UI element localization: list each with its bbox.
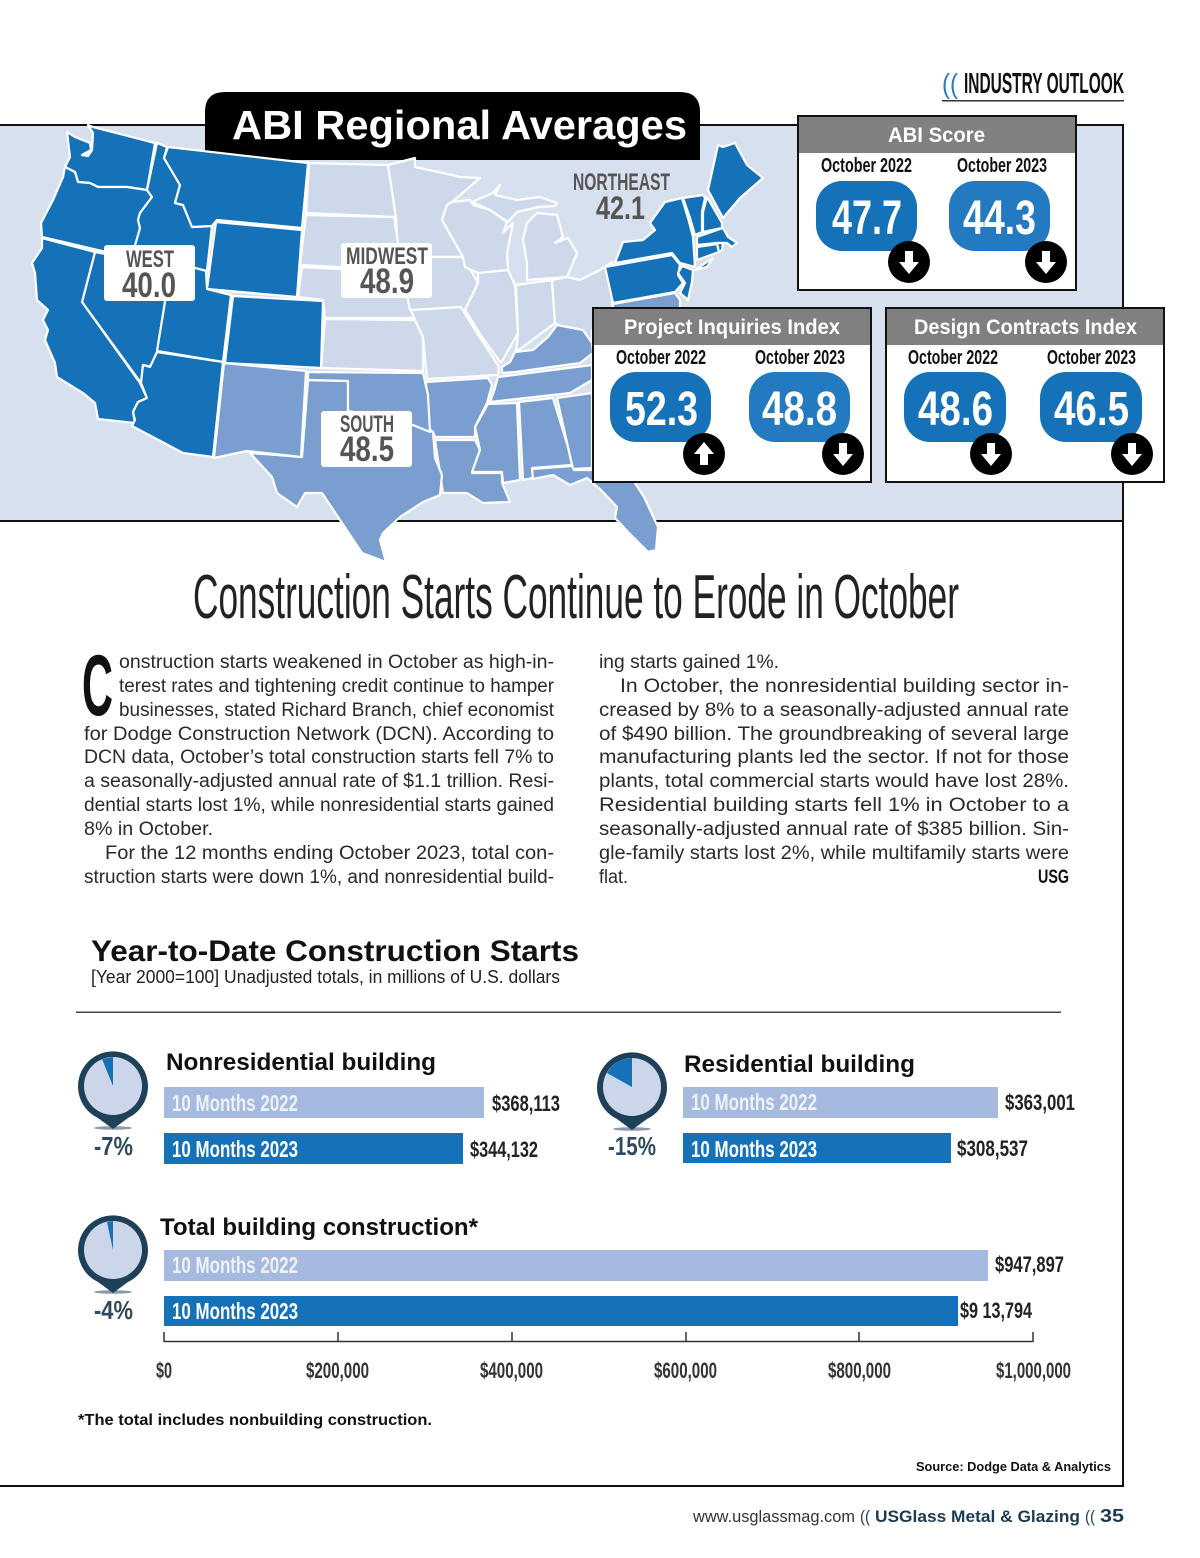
chart axis <box>156 1332 1071 1383</box>
chart axis: $200,000 <box>306 1358 369 1383</box>
chart: nonresidential building: $368,113 <box>492 1091 560 1116</box>
midwest region states <box>298 158 612 379</box>
northeast region states <box>605 143 763 303</box>
callout: northeast region: 42.1 <box>596 190 645 226</box>
chart: nonresidential building: Nonresidential building <box>166 1049 436 1076</box>
chart: total building construction: $947,897 <box>995 1252 1064 1277</box>
article text: right column: of $490 billion. The groundbreaking of several large <box>599 724 1069 745</box>
icon: gauge pin -7% <box>78 1051 148 1161</box>
article text: left column: terest rates and tightening credit continue to hamper <box>119 676 555 697</box>
chart: nonresidential building <box>164 1049 560 1164</box>
panel: Project Inquiries Index: Project Inquiries Index <box>624 316 840 339</box>
south region states <box>214 293 680 562</box>
article text: left column: 8% in October. <box>84 819 213 840</box>
callout: midwest region: MIDWEST <box>346 243 428 270</box>
icon: gauge pin -15% <box>597 1052 667 1161</box>
article text: right column <box>599 652 1069 888</box>
chart: nonresidential building: $344,132 <box>470 1137 538 1162</box>
chart: nonresidential building: 10 Months 2022 <box>172 1090 298 1116</box>
article text: left column: dential starts lost 1%, while nonresidential starts gained <box>84 795 554 816</box>
chart heading <box>76 935 1061 1013</box>
footnote: *The total includes nonbuilding construction. <box>78 1412 432 1429</box>
chart axis: $600,000 <box>654 1358 717 1383</box>
callout: south region <box>321 411 412 469</box>
panel: ABI Score: ABI Score <box>888 124 985 147</box>
article text: right column: USG <box>1038 867 1069 888</box>
article text: left column: businesses, stated Richard Branch, chief economist <box>119 700 555 721</box>
article text: right column: gle-family starts lost 2%, while multifamily starts were <box>599 843 1069 864</box>
icon: gauge pin -4% <box>78 1215 148 1325</box>
chart: total building construction: 10 Months 2022 <box>172 1252 298 1278</box>
chart: total building construction <box>160 1214 1064 1326</box>
callout: south region: SOUTH <box>340 411 394 438</box>
panel: Design Contracts Index: 48.6 <box>918 383 993 436</box>
callout: west region <box>104 245 195 305</box>
article text: right column: seasonally-adjusted annual rate of $385 billion. Sin- <box>599 819 1069 840</box>
article text: right column: In October, the nonresidential building sector in- <box>620 676 1069 697</box>
chart heading: Year-to-Date Construction Starts <box>91 935 579 968</box>
page footer: (( <box>1085 1507 1095 1526</box>
panel: Design Contracts Index: October 2022 <box>908 347 998 369</box>
article text: left column: a seasonally-adjusted annual rate of $1.1 trillion. Resi- <box>84 771 554 792</box>
panel: Design Contracts Index: Design Contracts Index <box>914 316 1137 339</box>
section label: industry outlook: (( <box>942 68 959 99</box>
article text: left column: struction starts were down 1%, and nonresidential build- <box>84 867 554 888</box>
page footer: (( <box>860 1507 870 1526</box>
page footer: www.usglassmag.com <box>692 1508 855 1526</box>
article text: right column: flat. <box>599 867 628 888</box>
article text: left column: for Dodge Construction Network (DCN). According to <box>84 724 554 745</box>
callout: midwest region <box>341 243 432 301</box>
title tab: ABI Regional Averages <box>205 92 700 160</box>
article text: right column: creased by 8% to a seasonally-adjusted annual rate <box>599 700 1069 721</box>
map: United States by region <box>32 125 763 562</box>
panel: ABI Score: October 2022 <box>821 155 912 177</box>
panel: Project Inquiries Index: 52.3 <box>625 383 698 436</box>
panel: Design Contracts Index <box>886 308 1164 482</box>
chart axis: $1,000,000 <box>996 1358 1071 1383</box>
icon: gauge pin -7%: -7% <box>94 1131 133 1161</box>
chart: residential building: $308,537 <box>957 1136 1028 1161</box>
article text: right column: plants, total commercial starts would have lost 28%. <box>599 771 1069 792</box>
page footer <box>692 1506 1124 1526</box>
chart: residential building: $363,001 <box>1005 1090 1075 1115</box>
panel: Design Contracts Index: October 2023 <box>1047 347 1136 369</box>
title tab: ABI Regional Averages: ABI Regional Averages <box>232 102 687 148</box>
panel: ABI Score: 47.7 <box>832 192 902 245</box>
article text: right column: Residential building starts fell 1% in October to a <box>599 795 1069 816</box>
source: Source: Dodge Data & Analytics <box>916 1460 1111 1474</box>
chart axis: $0 <box>156 1358 172 1383</box>
icon: gauge pin -15%: -15% <box>608 1131 656 1161</box>
article text: right column: ing starts gained 1%. <box>599 652 779 673</box>
chart: residential building: 10 Months 2022 <box>691 1089 817 1115</box>
page footer: USGlass Metal & Glazing <box>875 1507 1080 1526</box>
chart: total building construction: Total building construction* <box>160 1214 479 1241</box>
chart: residential building <box>683 1051 1075 1163</box>
article text: left column: For the 12 months ending October 2023, total con- <box>105 843 554 864</box>
chart heading: [Year 2000=100] Unadjusted totals, in millions of U.S. dollars <box>91 967 560 987</box>
chart: total building construction: $9 13,794 <box>960 1298 1033 1323</box>
panel: ABI Score <box>798 116 1076 290</box>
callout: northeast region <box>573 169 670 226</box>
callout: midwest region: 48.9 <box>360 262 414 301</box>
chart axis: $800,000 <box>828 1358 891 1383</box>
page footer: 35 <box>1100 1506 1124 1526</box>
panel: ABI Score: 44.3 <box>963 192 1036 245</box>
callout: south region: 48.5 <box>340 430 394 469</box>
panel: Project Inquiries Index: 48.8 <box>762 383 837 436</box>
panel: Design Contracts Index: 46.5 <box>1054 383 1129 436</box>
west region states <box>32 125 323 457</box>
panel: ABI Score: October 2023 <box>957 155 1047 177</box>
panel: Project Inquiries Index <box>593 308 871 482</box>
article text: left column <box>82 638 555 888</box>
panel: Project Inquiries Index: October 2023 <box>755 347 845 369</box>
chart: residential building: Residential building <box>684 1051 915 1078</box>
callout: northeast region: NORTHEAST <box>573 169 670 196</box>
article text: left column: DCN data, October’s total construction starts fell 7% to <box>84 747 554 768</box>
chart: nonresidential building: 10 Months 2023 <box>172 1136 298 1162</box>
article text: left column: C <box>82 638 113 734</box>
icon: gauge pin -4%: -4% <box>94 1295 133 1325</box>
callout: west region: 40.0 <box>122 266 176 305</box>
section label: industry outlook <box>942 68 1124 102</box>
chart: total building construction: 10 Months 2023 <box>172 1298 298 1324</box>
article text: left column: onstruction starts weakened in October as high-in- <box>119 652 554 673</box>
chart: residential building: 10 Months 2023 <box>691 1136 817 1162</box>
panel: Project Inquiries Index: October 2022 <box>616 347 706 369</box>
article text: right column: manufacturing plants led the sector. If not for those <box>599 747 1069 768</box>
chart axis: $400,000 <box>480 1358 543 1383</box>
callout: west region: WEST <box>126 246 174 273</box>
